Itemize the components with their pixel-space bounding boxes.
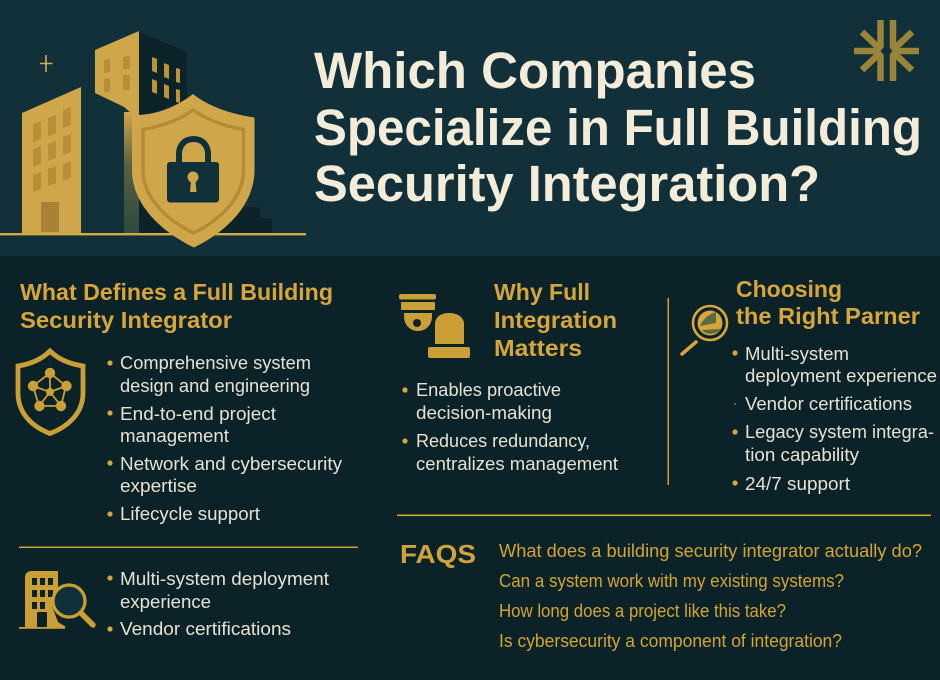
panel: choosing the right partner: [682, 276, 937, 494]
panel: FAQs: [400, 539, 922, 651]
bullet list: selection criteria: deployment experience: [745, 366, 937, 386]
icon: magnifier with chart: [682, 306, 727, 354]
bullet list: experience: [107, 569, 329, 639]
icon: camera and alarm: [399, 294, 470, 358]
bullet list: benefits: Enables proactive: [416, 380, 561, 400]
question list: [499, 541, 922, 651]
panel: what defines a full building security integrator: [18, 279, 358, 639]
heading: FAQS: [400, 539, 476, 569]
question list: What does a building security integrator actually do?: [499, 541, 922, 561]
heading: [20, 279, 333, 333]
bullet list: selection criteria: 24/7 support: [745, 474, 850, 494]
heading: What Defines a Full Building: [20, 279, 333, 305]
panel: why full integration matters: [399, 279, 618, 474]
ground line: [0, 233, 306, 235]
bullet list: experience: experience: [120, 592, 211, 612]
bullet list: benefits: centralizes management: [416, 454, 618, 474]
question list: Can a system work with my existing systems?: [499, 571, 844, 591]
icon: shield with padlock: [132, 94, 254, 248]
illustration: buildings with shield: [0, 31, 306, 248]
title: [314, 42, 922, 212]
bullet list: capabilities: management: [120, 426, 229, 446]
icon: logo asterisk: [854, 20, 919, 81]
question list: Is cybersecurity a component of integration?: [499, 631, 842, 651]
heading: Integration: [494, 307, 617, 333]
heading: Matters: [494, 335, 582, 361]
bullet list: selection criteria: Legacy system integra-: [745, 422, 934, 442]
heading: [736, 276, 920, 329]
gradient strip: [124, 112, 139, 233]
bullet list: selection criteria: tion capability: [745, 445, 859, 465]
bullet list: benefits: [402, 380, 618, 474]
bullet list: benefits: decision-making: [416, 403, 552, 423]
heading: Choosing: [736, 276, 842, 302]
question list: How long does a project like this take?: [499, 601, 786, 621]
title: Specialize in Full Building: [314, 99, 922, 156]
heading: Why Full: [494, 279, 590, 305]
icon: building with magnifier: [19, 571, 93, 629]
heading: Security Integrator: [20, 307, 232, 333]
bullet list: capabilities: Network and cybersecurity: [120, 454, 342, 474]
panel: header: [0, 0, 940, 256]
icon: sparkle plus: [40, 55, 52, 72]
bullet list: selection criteria: Vendor certifications: [745, 394, 912, 414]
heading: [494, 279, 617, 361]
bullet list: experience: Vendor certifications: [120, 619, 291, 639]
bullet list: capabilities: Comprehensive system: [120, 353, 311, 373]
title: Which Companies: [314, 42, 756, 99]
bullet list: experience: Multi-system deployment: [120, 569, 329, 589]
bullet list: capabilities: Lifecycle support: [120, 504, 260, 524]
title: Security Integration?: [314, 155, 820, 212]
heading: the Right Parner: [736, 303, 920, 329]
bullet list: selection criteria: Multi-system: [745, 344, 849, 364]
back building: [95, 31, 187, 120]
bullet list: capabilities: [107, 353, 342, 524]
bullet list: capabilities: design and engineering: [120, 376, 310, 396]
back steps: [200, 207, 272, 233]
bullet list: selection criteria: [732, 344, 937, 494]
bullet list: benefits: Reduces redundancy,: [416, 431, 590, 451]
icon: shield network: [18, 351, 83, 434]
bullet list: capabilities: End-to-end project: [120, 404, 276, 424]
bullet list: capabilities: expertise: [120, 476, 197, 496]
front building: [22, 87, 124, 233]
